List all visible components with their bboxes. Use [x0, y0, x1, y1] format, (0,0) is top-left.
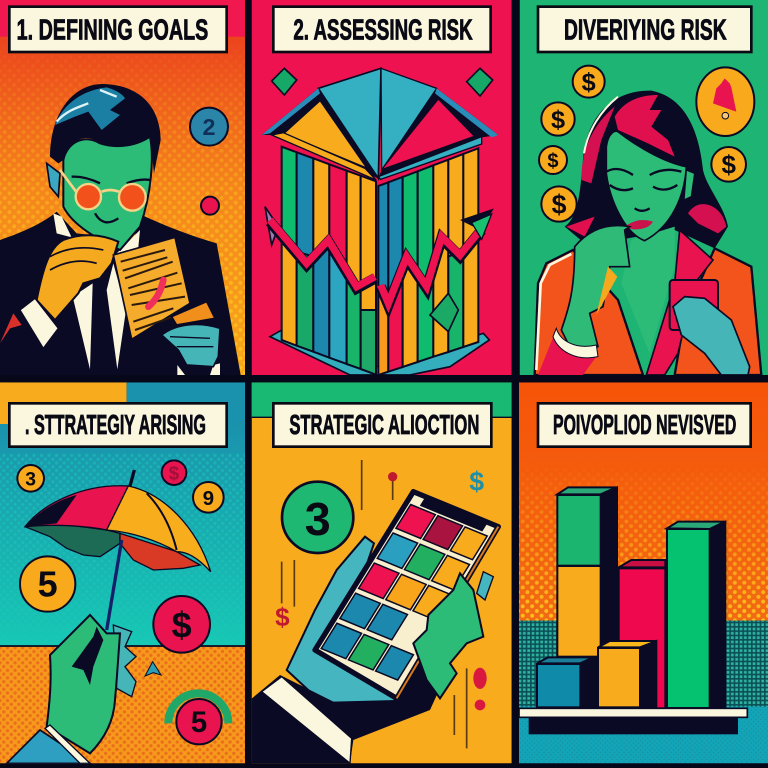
icon: hand holding smartphone: [250, 492, 498, 763]
icon: dollar coins: $: [547, 150, 559, 172]
icon: number and dollar coins: 9: [203, 487, 214, 510]
heading: strategy arising: [9, 403, 227, 447]
heading: assessing risk: 2. ASSESSING RISK: [293, 15, 473, 47]
icon: dollar coins: $: [721, 149, 736, 179]
heading: diversifying risk: [538, 7, 751, 52]
icon: number badge 2: [190, 108, 228, 146]
icon: number badge 3: 3: [305, 493, 331, 545]
icon: number and dollar coins: $: [172, 604, 192, 645]
icon: umbrella: [25, 470, 211, 630]
heading: defining goals: [9, 7, 227, 52]
panel: diversifying risk: [520, 0, 768, 375]
figure: man in suit reading a document: [0, 84, 241, 375]
icon: green diamond left: [272, 68, 297, 95]
icon: number and dollar coins: $: [169, 462, 180, 483]
icon: dollar coins: [539, 66, 746, 222]
chart baseline shelf: [519, 708, 747, 734]
icon: number badge 3: [282, 482, 353, 553]
heading: assessing risk: [273, 7, 491, 52]
heading: defining goals: 1. DEFINING GOALS: [17, 15, 208, 47]
panel: strategy arising: [0, 382, 245, 763]
chart: 3D bar chart: [537, 487, 725, 708]
heading: strategic allocation: [273, 403, 491, 447]
icon: dollar coins: $: [552, 189, 567, 219]
icon: green hand and sleeve: [7, 615, 136, 763]
icon: dollars and motion lines: $: [469, 467, 484, 497]
panel: defining goals: [0, 0, 245, 375]
panel: strategic allocation: [250, 382, 512, 763]
icon: dollars and motion lines: $: [275, 602, 290, 632]
icon: number and dollar coins: 5: [38, 564, 58, 605]
panel: portfolio revised: [519, 382, 768, 763]
icon: small triangle: [145, 662, 161, 676]
heading: strategy arising: . STTRATEGIY ARISING: [25, 409, 206, 440]
chart: house of bars with zigzag risk line: [262, 68, 498, 375]
icon: dollar coins: $: [582, 69, 596, 97]
heading: strategic allocation: STRATEGIC ALIOCTION: [289, 409, 479, 440]
icon: red dot: [201, 197, 219, 215]
icon: number and dollar coins: [17, 460, 228, 744]
icon: bell coin: [696, 67, 754, 136]
heading: portfolio revised: [538, 403, 751, 447]
icon: green diamond right: [467, 68, 493, 96]
figure: woman looking at phone: [535, 91, 761, 375]
icon: number and dollar coins: 5: [191, 706, 207, 739]
icon: dollars and motion lines: [275, 460, 487, 748]
icon: number badge 2: 2: [203, 114, 216, 140]
icon: number and dollar coins: 3: [25, 469, 36, 490]
icon: dollar coins: $: [551, 106, 565, 134]
panel: assessing risk: [252, 0, 512, 375]
